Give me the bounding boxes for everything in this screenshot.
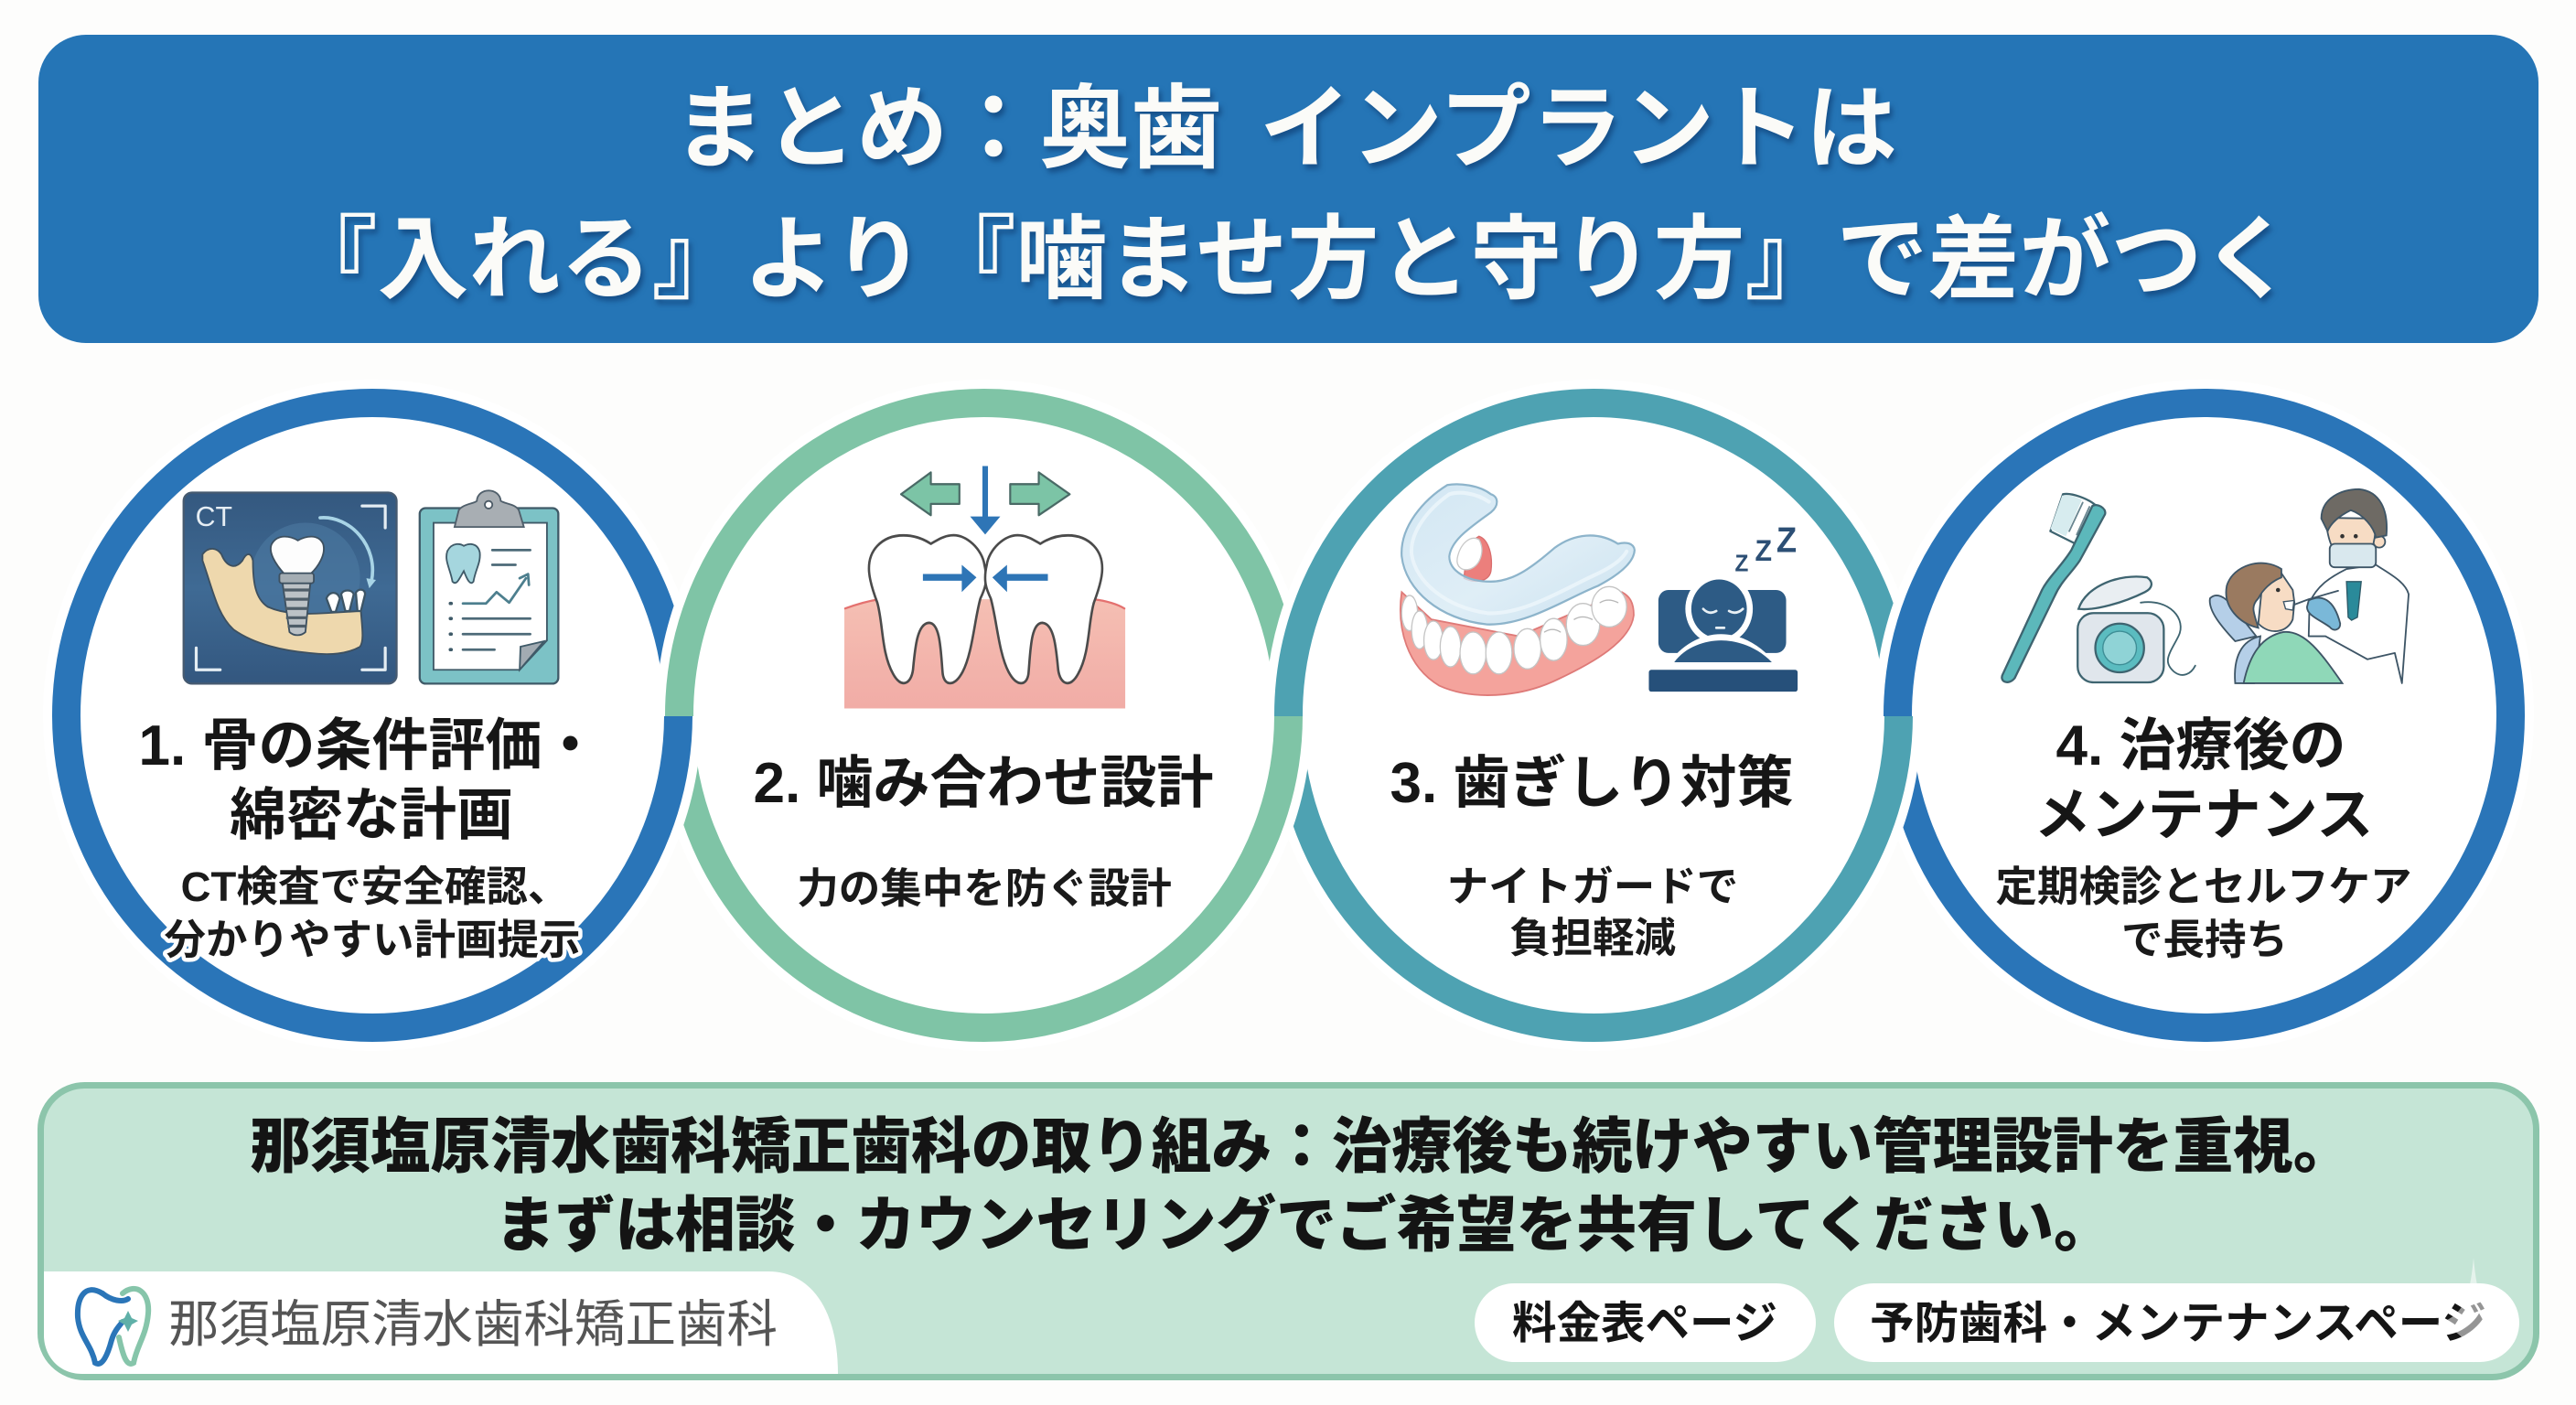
- description: step 1: 分かりやすい計画提示: [164, 917, 581, 963]
- description: step 3: 負担軽減: [1509, 915, 1676, 961]
- heading: step 4: メンテナンス: [2034, 784, 2373, 847]
- message text: 那須塩原清水歯科矯正歯科の取り組み：治療後も続けやすい管理設計を重視。: [250, 1113, 2354, 1180]
- panel: step 3 bruxism: [1390, 484, 1798, 961]
- title: [285, 78, 2294, 311]
- clinic name: 那須塩原清水歯科矯正歯科: [168, 1296, 778, 1353]
- description: step 4: [1995, 863, 2412, 963]
- panel: step 1 bone evaluation: [139, 490, 598, 963]
- link pill: price list: [1475, 1283, 1816, 1362]
- icon: CT scan with implant: [184, 492, 397, 683]
- description: step 1: [164, 863, 581, 963]
- heading: step 1: 綿密な計画: [230, 784, 513, 847]
- title: まとめ：奥歯 インプラントは: [673, 78, 1897, 180]
- icon: sleeping person: Z: [1776, 520, 1797, 560]
- icon: night guard on dental arch: [1401, 484, 1635, 695]
- heading: step 4: [2034, 714, 2373, 847]
- description: step 3: ナイトガードで: [1447, 863, 1738, 910]
- heading: step 3: 3. 歯ぎしり対策: [1390, 752, 1793, 815]
- clinic logo tab: [44, 1271, 838, 1374]
- link pill: price list: 料金表ページ: [1512, 1299, 1777, 1348]
- message text: まずは相談・カウンセリングでご希望を共有してください。: [495, 1192, 2114, 1259]
- icon: treatment plan clipboard: [420, 490, 558, 683]
- interlocking rings: [43, 380, 2534, 1051]
- sparkle: [2437, 1258, 2510, 1363]
- icon: teeth with force arrows: [844, 467, 1125, 709]
- heading: step 1: 1. 骨の条件評価・: [139, 714, 598, 778]
- icon: sleeping person: Z: [1735, 551, 1748, 577]
- message text: [250, 1113, 2354, 1259]
- panel: clinic message footer: [40, 1085, 2536, 1378]
- panel: step 2 occlusion design: [754, 467, 1213, 912]
- description: step 1: CT検査で安全確認、: [181, 863, 569, 910]
- description: step 4: で長持ち: [2121, 917, 2288, 963]
- link pill: preventive care: 予防歯科・メンテナンスページ: [1870, 1299, 2486, 1348]
- icon: CT scan with implant: CT: [196, 502, 232, 532]
- icon: tooth logo: [78, 1289, 148, 1364]
- description: step 4: 定期検診とセルフケア: [1995, 863, 2412, 910]
- title: 『入れる』より『噛ませ方と守り方』で差がつく: [285, 209, 2294, 311]
- panel: step 4 maintenance: [1995, 489, 2412, 963]
- heading: step 1: [139, 714, 598, 847]
- icon: dental floss: [2077, 576, 2195, 682]
- description: step 2: 力の集中を防ぐ設計: [797, 865, 1172, 912]
- heading: step 2: 2. 噛み合わせ設計: [754, 752, 1213, 815]
- link pill: preventive care: [1834, 1283, 2519, 1362]
- description: step 3: [1447, 863, 1738, 961]
- heading: step 4: 4. 治療後の: [2056, 714, 2345, 778]
- icon: dentist treating patient: [2210, 489, 2409, 683]
- icon: sleeping person: Z: [1755, 534, 1772, 567]
- icon: sleeping person: [1648, 520, 1798, 692]
- icon: toothbrush: [2002, 494, 2105, 682]
- header banner: [38, 35, 2538, 343]
